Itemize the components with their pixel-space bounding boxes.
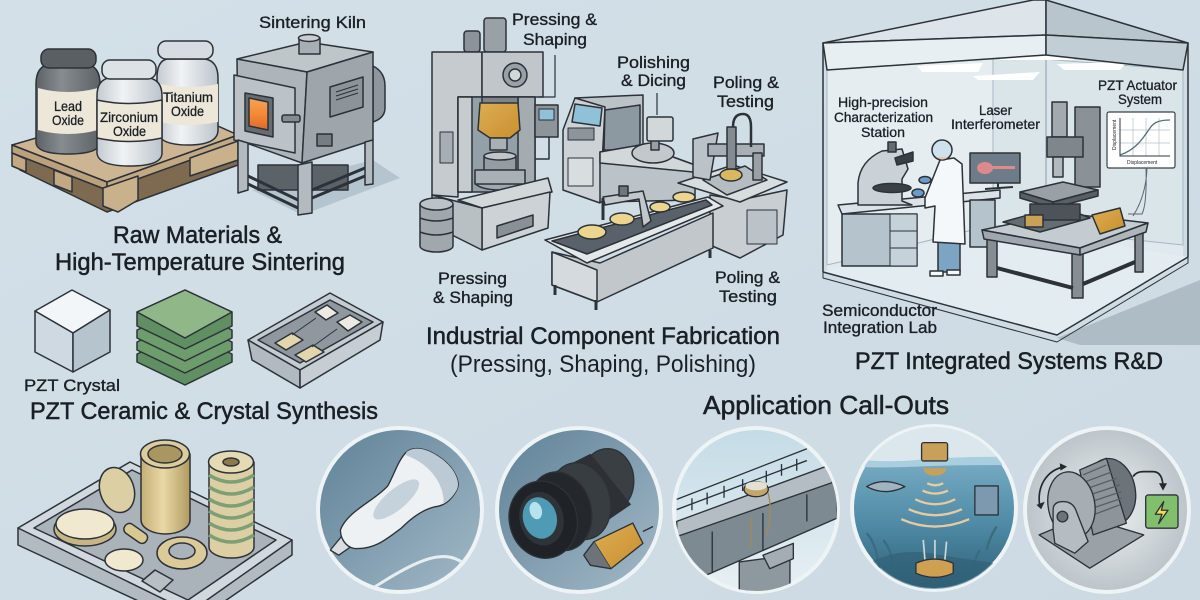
label: poling and testing lower: Poling & — [715, 268, 781, 287]
icon: poling station — [678, 114, 787, 258]
icon: characterization workbench — [838, 142, 1000, 266]
label: polishing and dicing: Polishing — [617, 53, 690, 72]
callout: bridge sensor — [674, 428, 838, 592]
panel: raw materials and sintering — [12, 13, 400, 276]
label: pressing and shaping lower second line: & Shaping — [433, 288, 513, 307]
chart: displacement curve — [1107, 112, 1175, 216]
heading: fabrication subtitle: (Pressing, Shaping, Polishing) — [450, 351, 756, 378]
icon: flat disc — [54, 509, 116, 546]
label: zirconium oxide: Zirconium — [100, 109, 158, 125]
label: semiconductor integration lab: Semiconductor — [822, 301, 937, 320]
label: high-precision station third line: Station — [861, 124, 905, 140]
label: pressing and shaping top second line: Shaping — [523, 30, 587, 49]
callout: camera lens with actuator — [497, 428, 661, 592]
panel: ceramic and crystal synthesis — [24, 290, 383, 425]
icon: sintering kiln — [234, 34, 400, 215]
icon: hydraulic press — [432, 18, 558, 250]
label: laser interferometer: Laser — [979, 102, 1012, 118]
icon: cleanroom enclosure — [823, 0, 1200, 345]
label: poling and testing lower second line: Testing — [719, 287, 777, 306]
label: laser interferometer second line: Interferometer — [951, 116, 1040, 132]
label: poling and testing top second line: Testing — [717, 92, 774, 111]
label: titanium oxide second line: Oxide — [171, 103, 204, 119]
label: high-precision station second line: Characterization — [834, 109, 933, 125]
heading: raw materials second line: High-Temperature Sintering — [55, 249, 345, 276]
heading: ceramic and crystal synthesis: PZT Ceramic & Crystal Synthesis — [30, 398, 378, 425]
icon: conveyor belt — [545, 186, 723, 310]
icon: wooden pallet — [12, 118, 238, 212]
icon: small disc — [105, 549, 143, 571]
panel: integrated systems R&D lab — [822, 0, 1200, 375]
icon: small upright disc — [94, 463, 140, 517]
callout: motor and energy harvesting — [1025, 428, 1189, 592]
chart: displacement curve: Displacement — [1112, 119, 1118, 150]
label: titanium oxide: Titanium — [163, 89, 213, 105]
icon: lead oxide jar — [36, 49, 100, 154]
icon: polishing machine — [563, 93, 695, 203]
callout: underwater sonar — [850, 423, 1020, 593]
heading: application call-outs: Application Call-Outs — [703, 390, 949, 420]
icon: stacked green and brass rings — [208, 451, 254, 558]
label: pressing and shaping top: Pressing & — [512, 10, 598, 29]
icon: green ceramic plates — [137, 290, 232, 385]
icon: titanium oxide jar — [157, 41, 218, 145]
icon: metal tray — [18, 462, 292, 600]
panel: PZT components tray — [18, 440, 292, 600]
panel: industrial component fabrication — [420, 10, 787, 378]
label: pressing and shaping lower: Pressing — [438, 269, 507, 288]
label: sintering kiln: Sintering Kiln — [259, 13, 366, 32]
label: PZT actuator system second line: System — [1118, 91, 1162, 107]
icon: small chip — [142, 570, 173, 592]
icon: flat ring — [157, 537, 207, 569]
icon: computer monitor — [970, 153, 1020, 189]
icon: zirconium oxide jar — [97, 60, 162, 166]
icon: small cylinder — [122, 521, 150, 545]
label: lead oxide second line: Oxide — [52, 112, 84, 128]
icon: metal drum — [420, 198, 453, 252]
heading: integrated systems R&D: PZT Integrated Systems R&D — [855, 348, 1163, 375]
label: PZT actuator system: PZT Actuator — [1098, 77, 1177, 93]
label: lead oxide: Lead — [54, 98, 82, 114]
icon: PZT crystal cube — [35, 290, 110, 372]
heading: industrial component fabrication: Industrial Component Fabrication — [426, 323, 780, 350]
label: poling and testing top: Poling & — [713, 73, 780, 92]
heading: raw materials: Raw Materials & — [113, 222, 282, 249]
chart: displacement curve: Displacement — [1127, 160, 1158, 166]
label: polishing and dicing second line: & Dicing — [621, 71, 686, 90]
label: PZT crystal: PZT Crystal — [24, 376, 120, 395]
callout: ultrasound probe — [318, 428, 482, 592]
icon: tray of crystal components — [248, 293, 383, 388]
icon: scientist in white coat — [912, 140, 965, 276]
icon: actuator test table — [982, 102, 1148, 298]
icon: brass tube — [140, 440, 190, 534]
label: zirconium oxide second line: Oxide — [113, 123, 146, 139]
label: high-precision station: High-precision — [838, 94, 928, 110]
label: semiconductor integration lab second line: Integration Lab — [823, 318, 937, 337]
